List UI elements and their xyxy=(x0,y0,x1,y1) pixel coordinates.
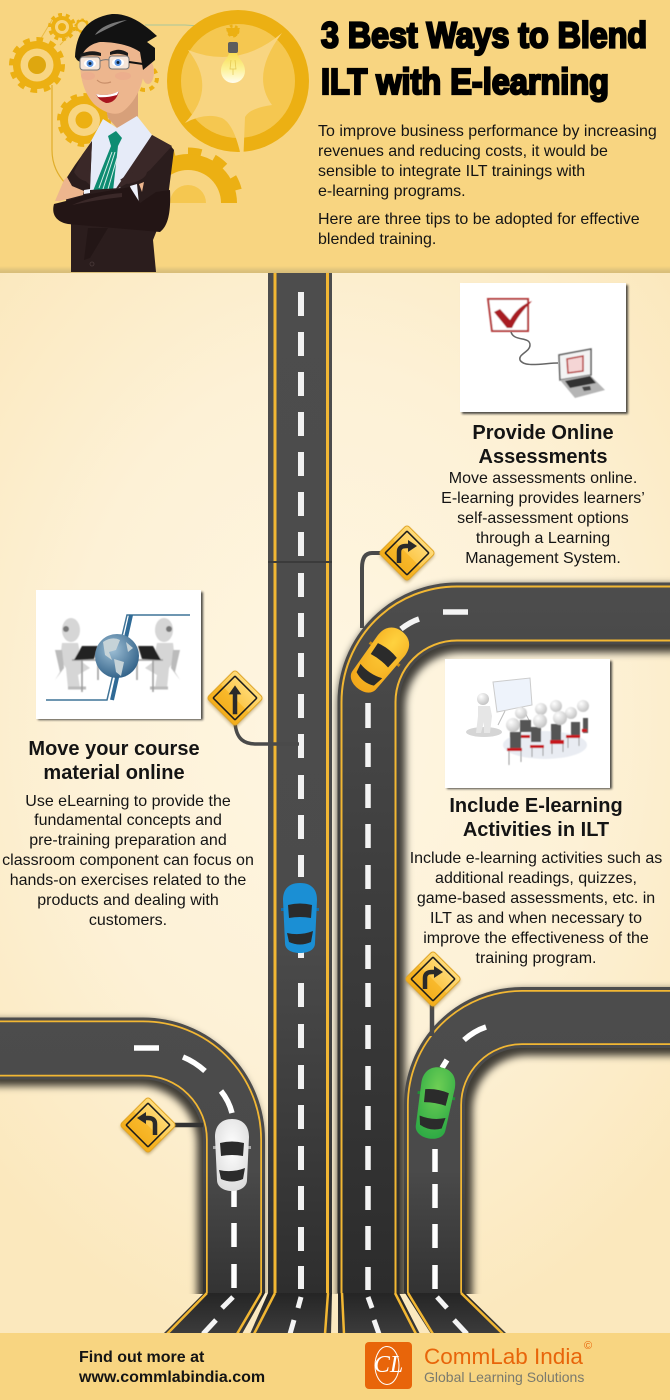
description: Use eLearning to provide the xyxy=(25,792,231,810)
footer link text: www.commlabindia.com xyxy=(79,1369,265,1386)
description: pre-training preparation and xyxy=(29,832,227,849)
card: classroom activities image xyxy=(445,659,612,789)
intro text: blended training. xyxy=(318,231,436,248)
figure left xyxy=(55,618,98,692)
cable xyxy=(511,332,558,365)
flip chart xyxy=(493,678,532,725)
shirt xyxy=(90,116,152,190)
icon: light bulb circle xyxy=(167,10,309,167)
road perspective ends xyxy=(163,1293,507,1334)
lane dashes xyxy=(435,1027,486,1289)
logo mark: CL xyxy=(374,1352,403,1378)
intro text: Here are three tips to be adopted for effective xyxy=(318,211,640,228)
presenter xyxy=(466,693,502,737)
intro text: sensible to integrate ILT trainings with xyxy=(318,163,585,180)
heading xyxy=(472,422,614,468)
road: lower right branch xyxy=(434,1018,670,1305)
lane dashes xyxy=(368,612,468,1290)
logo name: CommLab India xyxy=(424,1344,583,1369)
intro text xyxy=(318,123,657,248)
icon: globe xyxy=(95,634,139,678)
icon: gears xyxy=(9,13,242,203)
sign: left curve xyxy=(120,1097,176,1155)
heading: Assessments xyxy=(479,446,607,468)
network lines xyxy=(46,615,190,700)
description: additional readings, quizzes, xyxy=(435,870,637,886)
icon: laptop xyxy=(559,349,605,398)
face xyxy=(80,42,144,114)
neck xyxy=(106,92,138,128)
heading: material online xyxy=(43,762,185,784)
audience xyxy=(503,700,589,765)
header illustration xyxy=(12,10,309,272)
sign: right curve upper xyxy=(379,525,435,583)
nose and mouth xyxy=(96,80,119,103)
car: green xyxy=(410,1064,460,1142)
heading: Include E-learning xyxy=(449,794,623,816)
text block: include e-learning activities xyxy=(410,794,662,966)
road: main vertical xyxy=(268,265,332,1300)
jacket xyxy=(62,135,174,272)
footer link text xyxy=(79,1349,265,1386)
footer link text: Find out more at xyxy=(79,1349,204,1366)
description: through a Learning xyxy=(476,530,610,546)
card: online assessments image xyxy=(460,283,628,414)
description: game-based assessments, etc. in xyxy=(417,890,655,906)
heading: Provide Online xyxy=(472,422,614,444)
footer band xyxy=(0,1333,670,1400)
icon: red checkbox xyxy=(488,299,532,331)
arms crossed xyxy=(53,177,170,232)
car: blue xyxy=(281,883,319,953)
ear xyxy=(143,62,154,84)
title xyxy=(321,14,647,102)
figure right xyxy=(137,618,180,692)
eyes and glasses xyxy=(80,50,143,70)
sign: straight ahead xyxy=(207,670,263,728)
description xyxy=(410,850,662,966)
description: training program. xyxy=(476,950,596,966)
sign posts xyxy=(172,553,432,1125)
description: E-learning provides learners’ xyxy=(441,490,645,506)
text block: provide online assessments xyxy=(441,422,645,566)
description: improve the effectiveness of the xyxy=(423,930,649,946)
description: fundamental concepts and xyxy=(34,812,222,829)
description xyxy=(441,470,645,566)
description: Management System. xyxy=(465,550,621,566)
card: course material image xyxy=(36,590,203,720)
hair xyxy=(75,14,157,70)
description: hands-on exercises related to the xyxy=(10,872,246,889)
description: products and dealing with xyxy=(37,892,219,909)
title: ILT with E-learning xyxy=(321,61,609,102)
description: Move assessments online. xyxy=(449,470,637,486)
heading xyxy=(28,738,200,784)
intro text: e-learning programs. xyxy=(318,183,466,200)
text block: move your course material online xyxy=(2,738,254,929)
logo copyright: © xyxy=(584,1340,592,1352)
road: upper right branch xyxy=(368,612,670,1305)
heading: Move your course xyxy=(28,738,200,760)
header band xyxy=(0,0,670,273)
car: white xyxy=(213,1119,251,1191)
road: lower left branch xyxy=(0,1048,234,1305)
car: yellow xyxy=(343,620,417,700)
character: businessman xyxy=(53,14,174,272)
logo xyxy=(365,1340,592,1389)
logo mark xyxy=(365,1342,412,1389)
description: ILT as and when necessary to xyxy=(430,910,642,926)
wire and gear links xyxy=(41,20,194,182)
logo tagline: Global Learning Solutions xyxy=(424,1369,584,1385)
description: classroom component can focus on xyxy=(2,852,254,869)
intro text: revenues and reducing costs, it would be xyxy=(318,143,608,160)
description: customers. xyxy=(89,912,167,929)
heading: Activities in ILT xyxy=(463,819,609,841)
tie xyxy=(93,131,122,191)
lane dashes xyxy=(134,1048,234,1288)
sign: right curve lower xyxy=(405,951,461,1009)
description xyxy=(2,792,254,929)
description: Include e-learning activities such as xyxy=(410,850,662,866)
intro text: To improve business performance by increasing xyxy=(318,123,657,140)
lane dashes xyxy=(298,292,304,1289)
heading xyxy=(449,794,623,841)
description: self-assessment options xyxy=(457,510,629,526)
